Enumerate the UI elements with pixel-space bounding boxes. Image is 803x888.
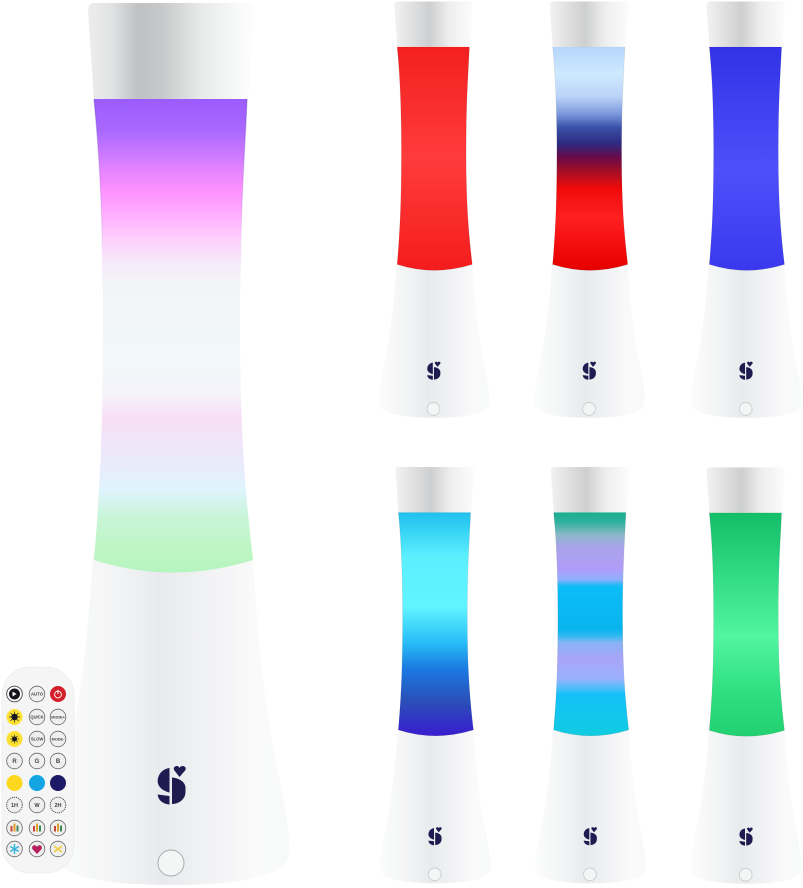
button: two hour timer: 2H	[54, 803, 62, 809]
logo	[428, 827, 442, 845]
button: sun scene	[50, 841, 66, 857]
colour button: yellow	[6, 775, 22, 791]
button: two hour timer	[50, 797, 66, 813]
lamp cap	[551, 467, 629, 512]
colour button: navy	[50, 775, 66, 791]
small lamp: blue and red	[534, 2, 645, 418]
logo	[739, 362, 753, 380]
button: white	[29, 797, 45, 813]
lamp cap	[394, 2, 473, 47]
lamp base	[535, 726, 646, 883]
lamp cap	[396, 467, 474, 512]
power button	[583, 402, 595, 415]
button: music mode 2	[29, 820, 45, 836]
logo	[739, 828, 753, 846]
button: auto: AUTO	[31, 692, 44, 697]
button: mode minus	[50, 731, 66, 747]
small lamp: red	[379, 2, 489, 418]
lamp base	[691, 261, 802, 418]
power button	[158, 850, 184, 876]
button: slow: SLOW	[31, 736, 43, 742]
lamp cap	[88, 3, 254, 99]
small lamp: blue	[691, 2, 802, 418]
power button	[739, 868, 752, 881]
small lamp: green	[691, 467, 802, 884]
lamp base	[380, 726, 491, 883]
glass: purple, white and green	[94, 99, 253, 572]
button: one hour timer	[7, 797, 22, 813]
large lamp: purple, white and green	[55, 3, 289, 885]
lamp cap	[707, 467, 785, 513]
button: play mode	[7, 686, 22, 702]
button: snowflake scene	[7, 841, 22, 857]
button: white: W	[34, 803, 40, 809]
small lamp: multicolour bands	[535, 467, 646, 883]
lamp base	[534, 261, 645, 418]
power button	[428, 868, 441, 881]
lamp base	[55, 552, 289, 885]
button: music mode 1	[7, 820, 22, 836]
glass: teal, violet and cyan bands	[554, 512, 629, 736]
small lamp: cyan to indigo	[380, 467, 491, 883]
glass: green	[709, 513, 784, 736]
remote control	[2, 667, 74, 873]
logo	[583, 362, 596, 380]
button: blue	[50, 753, 66, 769]
logo	[427, 362, 440, 380]
lamp cap	[707, 2, 785, 47]
power button	[427, 402, 440, 415]
button: heart scene	[29, 841, 45, 857]
lamp base	[691, 727, 802, 884]
button: mode plus: MODE+	[51, 716, 66, 720]
button: brightness down	[6, 731, 22, 747]
button: blue: B	[56, 759, 61, 765]
button: brightness up	[6, 709, 22, 725]
glass edge shading	[94, 99, 247, 320]
glass: red	[397, 47, 472, 270]
power button	[584, 868, 596, 881]
button: quick	[29, 709, 45, 725]
button: music mode 3	[50, 820, 66, 836]
button: green: G	[35, 759, 40, 765]
power button	[739, 402, 752, 415]
glass: blue	[709, 47, 784, 270]
lamp base	[379, 261, 489, 418]
button: green	[29, 753, 45, 769]
button: slow	[29, 731, 45, 747]
colour button: sky blue	[29, 775, 45, 791]
remote body	[2, 667, 74, 873]
lamp cap	[550, 2, 628, 47]
button: power	[50, 686, 66, 702]
button: red: R	[12, 759, 17, 765]
button: mode plus	[50, 709, 66, 725]
button: red	[7, 753, 22, 769]
button: one hour timer: 1H	[11, 803, 18, 809]
glass: cyan to indigo	[398, 512, 473, 736]
logo	[584, 827, 597, 845]
button: mode minus: MODE-	[52, 738, 65, 742]
button: quick: QUICK	[30, 714, 44, 720]
button: auto	[29, 686, 45, 702]
glass: white, blue and red	[553, 47, 628, 270]
logo	[158, 766, 186, 804]
